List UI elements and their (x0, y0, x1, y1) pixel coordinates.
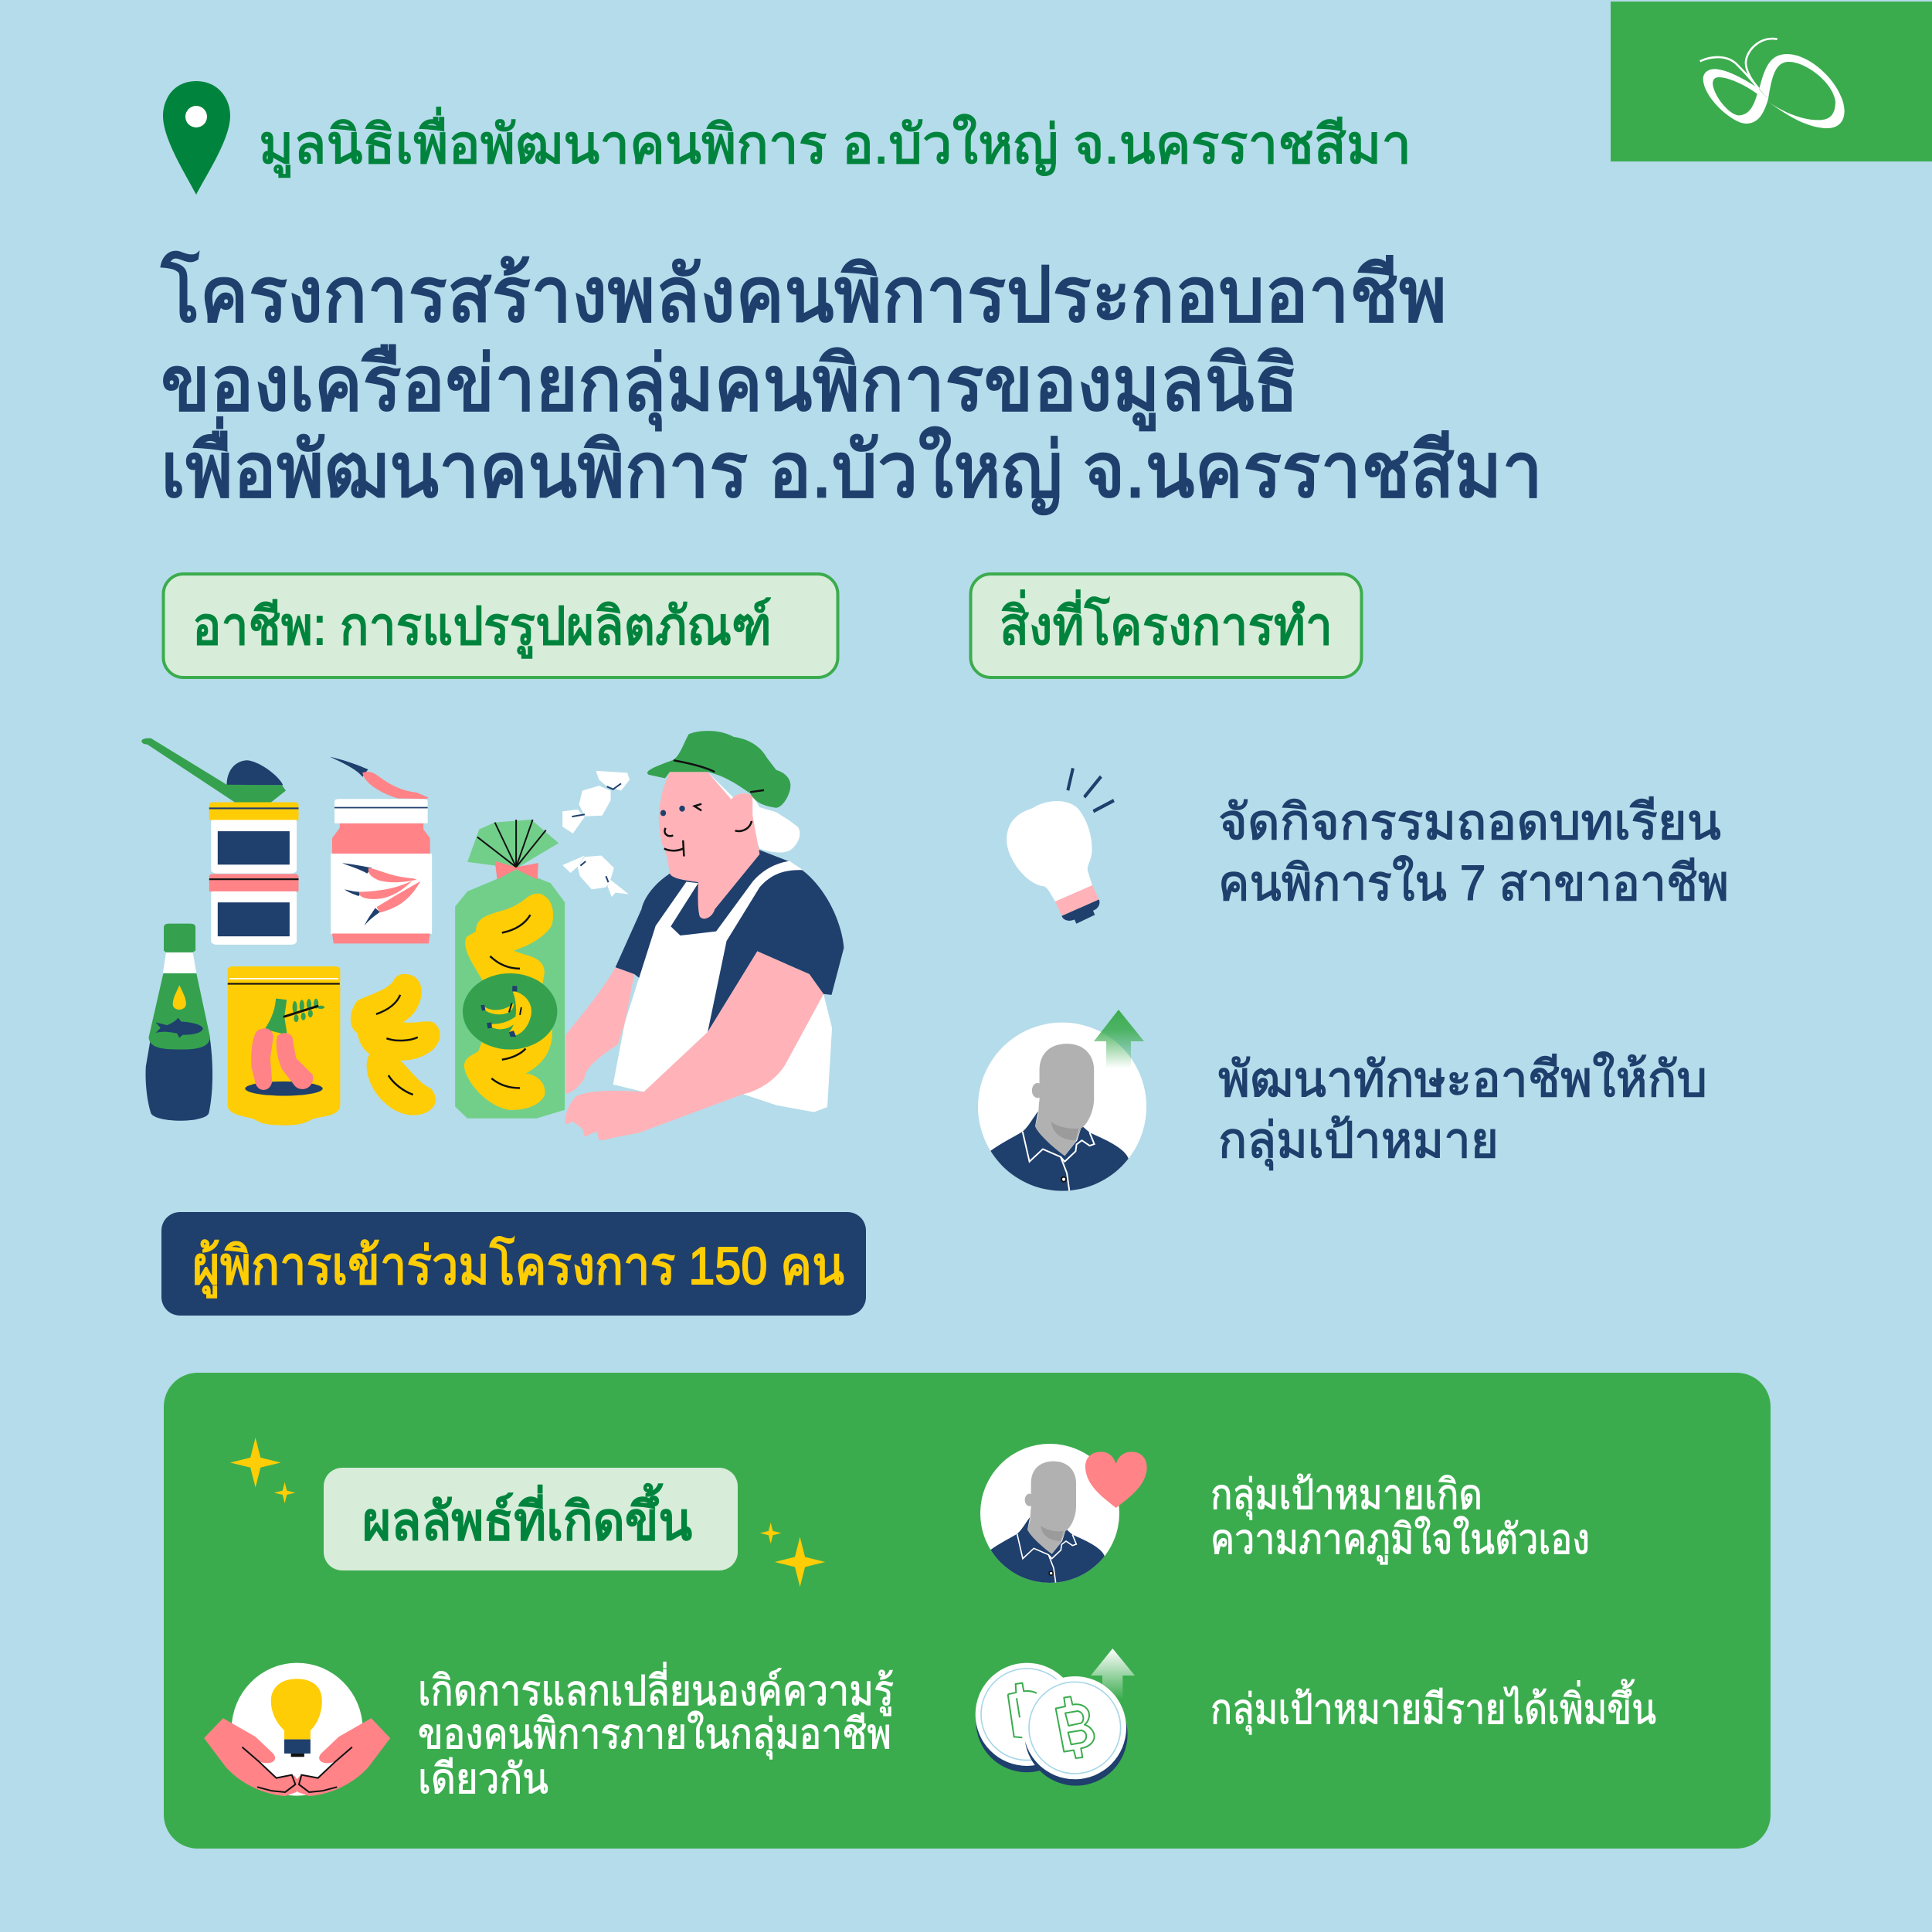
candies (562, 771, 630, 897)
label: occupation (164, 574, 837, 677)
title: ของเครือข่ายกลุ่มคนพิการของมูลนิธิ (161, 341, 1299, 431)
result text: knowledge (418, 1662, 894, 1802)
icon: location pin (163, 81, 230, 195)
participants banner: ผู้พิการเข้าร่วมโครงการ 150 คน (192, 1236, 844, 1298)
chili jar (330, 757, 432, 943)
banana chips (351, 974, 440, 1115)
result text: income: กลุ่มเป้าหมายมีรายได้เพิ่มขึ้น (1210, 1679, 1656, 1735)
activity text 2: พัฒนาทักษะอาชีพให้กับ (1218, 1051, 1707, 1107)
tamarind pouch (228, 966, 340, 1126)
label: occupation: อาชีพ: การแปรรูปผลิตภัณฑ์ (192, 597, 772, 658)
icon: growth arrow (1094, 1010, 1144, 1068)
label: what the project does (970, 574, 1361, 677)
title: โครงการสร้างพลังคนพิการประกอบอาชีพ (161, 252, 1447, 338)
icon: coins with arrow (976, 1648, 1135, 1786)
results heading pill: ผลลัพธ์ที่เกิดขึ้น (362, 1484, 692, 1551)
activity text 2 (1218, 1051, 1707, 1170)
icon: person with heart (980, 1444, 1147, 1583)
title: เพื่อพัฒนาคนพิการ อ.บัวใหญ่ จ.นครราชสีมา (161, 417, 1543, 514)
activity text 2: กลุ่มเป้าหมาย (1218, 1112, 1499, 1170)
snack bag (455, 820, 565, 1119)
result text: knowledge: เดียวกัน (418, 1756, 548, 1802)
icon: hands with bulb (204, 1663, 390, 1796)
participants banner (161, 1212, 866, 1316)
illustration: products and vendor (141, 731, 844, 1140)
location heading: มูลนิธิเพื่อพัฒนาคนพิการ อ.บัวใหญ่ จ.นครราชสีมา (259, 107, 1411, 178)
results heading pill (324, 1468, 738, 1570)
spoon (141, 739, 286, 803)
icon: person with growth arrow (978, 1023, 1146, 1191)
icon: light bulb (1007, 768, 1114, 924)
sauce bottle (146, 924, 212, 1121)
result text: pride: กลุ่มเป้าหมายเกิด (1210, 1472, 1482, 1520)
activity text 1: คนพิการใน 7 สาขาอาชีพ (1218, 855, 1729, 911)
activity text 1 (1218, 794, 1729, 911)
result text: pride (1210, 1472, 1590, 1564)
label: what the project does: สิ่งที่โครงการทำ (1000, 590, 1333, 656)
vendor (565, 731, 844, 1140)
logo block (1611, 2, 1932, 161)
title (161, 252, 1543, 514)
result text: pride: ความภาคภูมิใจในตัวเอง (1210, 1516, 1590, 1564)
activity text 1: จัดกิจกรรมถอดบทเรียน (1218, 794, 1721, 850)
panel: results (164, 1373, 1771, 1849)
sparkles (230, 1438, 825, 1587)
result text: knowledge: เกิดการแลกเปลี่ยนองค์ความรู้ (418, 1662, 894, 1716)
yellow jar (209, 803, 299, 874)
pink jar (209, 874, 299, 945)
result text: knowledge: ของคนพิการภายในกลุ่มอาชีพ (418, 1710, 891, 1760)
